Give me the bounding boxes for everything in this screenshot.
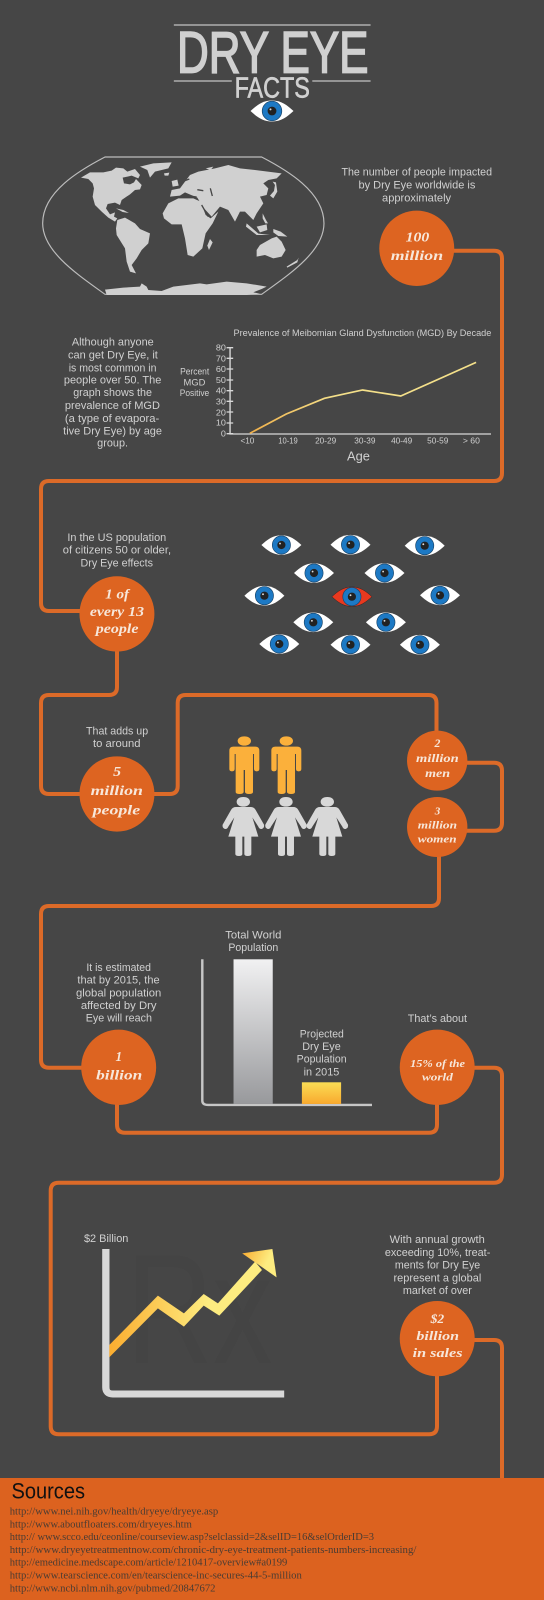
text: estimate: global population [76, 987, 161, 999]
y axis labels: 20 [216, 407, 226, 417]
source list: http:// www.scco.edu/ceonline/courseview.asp?selclassid=2&selID=16&selOrderID=3 [10, 1532, 374, 1543]
text: total world population: Population [228, 942, 278, 954]
circle: 2 million men: 2 [433, 737, 441, 750]
circle: 1 billion [81, 1030, 156, 1105]
new zealand [287, 258, 299, 268]
caribbean [116, 208, 129, 213]
circle: 3 million women: women [418, 834, 457, 845]
data line [250, 362, 476, 433]
circle: 5 million people: 5 [113, 764, 121, 780]
circle: 1 billion: 1 [116, 1049, 122, 1065]
text: annual growth: With annual growth [390, 1234, 485, 1246]
text: annual growth: exceeding 10%, treat- [385, 1247, 491, 1259]
x axis labels: 40-49 [391, 435, 412, 445]
text: worldwide intro: by Dry Eye worldwide is [358, 180, 476, 192]
source list: http://www.ncbi.nlm.nih.gov/pubmed/20847672 [10, 1583, 215, 1594]
text: age explanation: people over 50. The [64, 375, 161, 386]
panel: market growth [84, 1221, 491, 1397]
x axis labels: 50-59 [427, 435, 448, 445]
x axis labels: <10 [240, 435, 254, 445]
circle: 1 of every 13 people: every 13 [90, 604, 144, 619]
icon group: men and women [223, 736, 348, 856]
y axis title: MGD [184, 377, 206, 387]
y axis labels: 60 [216, 364, 226, 374]
text: age explanation: graph shows the [73, 387, 152, 399]
greenland [140, 162, 172, 178]
circle: 2 billion in sales [400, 1301, 475, 1376]
bar chart: population [202, 959, 372, 1105]
circle: 2 million men: million [416, 752, 459, 765]
circle: 3 million women: 3 [434, 806, 441, 818]
circle: 100 million: 100 [406, 230, 429, 244]
text: age explanation: group. [97, 438, 128, 450]
label: projected [297, 1028, 347, 1078]
text: estimate: that by 2015, the [77, 975, 160, 987]
circle: 1 of every 13 people: people [95, 621, 138, 636]
circle: 2 billion in sales: billion [416, 1328, 459, 1343]
heading: sources: Sources [11, 1479, 85, 1503]
text: age explanation: prevalence of MGD [65, 400, 160, 412]
text: estimate: It is estimated [86, 962, 151, 974]
text: total world population [225, 929, 281, 954]
y axis labels: 30 [216, 396, 226, 406]
circle: 2 million men: men [425, 767, 450, 780]
text: age explanation: is most common in [69, 363, 156, 374]
circle: 100 million [379, 211, 454, 286]
arrow head [242, 1249, 277, 1277]
icon: title eye [250, 100, 294, 122]
panel: mgd by age [63, 328, 491, 652]
x axis title: Age [347, 449, 370, 463]
y axis labels [216, 343, 226, 439]
y axis labels: 70 [216, 353, 226, 363]
icon group: thirteen eyes [244, 535, 460, 654]
text: adds up: That adds up [86, 726, 148, 738]
text: estimate [76, 962, 161, 1025]
growth chart [84, 1233, 284, 1394]
circle: 1 of every 13 people [79, 576, 154, 652]
south america [116, 218, 150, 273]
new guinea [273, 229, 287, 237]
text: annual growth [385, 1234, 491, 1297]
line chart: mgd prevalence [180, 328, 491, 463]
circle: 15% of the world [400, 1030, 475, 1105]
world map [43, 157, 324, 295]
y axis labels: 0 [221, 429, 226, 439]
watermark: rx: Rx [127, 1221, 272, 1397]
north america [81, 168, 142, 222]
text: worldwide intro [341, 167, 492, 205]
text: estimate: Eye will reach [86, 1013, 152, 1025]
circle: 15% of the world: 15% of the [410, 1058, 465, 1070]
australia [257, 237, 286, 258]
circle: 2 million men [407, 731, 467, 791]
circle: 3 million women: million [418, 820, 457, 831]
source list [10, 1506, 417, 1594]
circle: 1 of every 13 people: 1 of [105, 587, 131, 602]
connector path [41, 251, 502, 1480]
text: worldwide intro: approximately [382, 193, 451, 205]
source list: http://www.dryeyetreatmentnow.com/chronic-dry-eye-treatment-patients-numbers-increasing/ [10, 1545, 417, 1556]
africa [163, 198, 218, 257]
antarctica [105, 282, 267, 295]
chart axes [106, 1249, 284, 1394]
circle: 5 million people [79, 756, 154, 832]
text: age explanation: Although anyone [72, 337, 154, 348]
bar: world population [234, 959, 273, 1104]
label: projected: in 2015 [304, 1066, 339, 1078]
chart title: Prevalence of Meibomian Gland Dysfunction (MGD) By Decade [234, 328, 491, 338]
circle: 5 million people: million [91, 783, 143, 799]
label: 2 billion: $2 Billion [84, 1233, 128, 1245]
subtitle: facts: FACTS [235, 73, 310, 105]
panel: sources [0, 1478, 544, 1600]
circle: 2 billion in sales: in sales [413, 1345, 463, 1360]
source list: http://www.tearscience.com/en/tearscience-inc-secures-44-5-million [10, 1571, 302, 1582]
panel: five million [76, 726, 475, 1105]
y axis labels: 50 [216, 375, 226, 385]
icons: women [223, 797, 348, 856]
text: age explanation: tive Dry Eye) by age [63, 426, 162, 437]
text: total world population: Total World [225, 929, 281, 941]
circle: 5 million people: people [90, 803, 141, 818]
indonesia [246, 223, 270, 235]
text: adds up [86, 726, 148, 750]
circle: 3 million women [407, 797, 467, 857]
title block [174, 20, 371, 105]
text: adds up: to around [93, 738, 141, 750]
source list: http://www.nei.nih.gov/health/dryeye/dryeye.asp [10, 1506, 218, 1517]
circle: 15% of the world: world [422, 1071, 454, 1083]
y axis title [180, 366, 210, 398]
title: dry eye: DRY EYE [177, 20, 369, 85]
madagascar [207, 239, 213, 250]
philippines [263, 213, 268, 223]
x axis labels: 10-19 [278, 435, 298, 445]
japan [270, 182, 277, 198]
british isles and iceland [164, 167, 213, 187]
panel: worldwide [341, 167, 492, 286]
text: annual growth: ments for Dry Eye [395, 1260, 480, 1272]
source list: http://emedicine.medscape.com/article/1210417-overview#a0199 [10, 1558, 287, 1569]
x axis labels: > 60 [463, 435, 480, 445]
text: age explanation [63, 337, 162, 450]
icons: men [229, 736, 301, 794]
circle: 2 billion in sales: $2 [430, 1311, 445, 1326]
text: us population: of citizens 50 or older, [63, 545, 171, 557]
y axis labels: 40 [216, 386, 226, 396]
source list: http://www.aboutfloaters.com/dryeyes.htm [10, 1519, 192, 1530]
text: age explanation: (a type of evapora- [65, 413, 160, 425]
text: age explanation: can get Dry Eye, it [68, 350, 159, 361]
circle: 1 billion: billion [96, 1068, 142, 1083]
eurasia [170, 165, 282, 222]
text: us population [63, 532, 171, 569]
inland seas [183, 179, 212, 217]
text: annual growth: market of over [403, 1285, 472, 1297]
text: us population: Dry Eye effects [81, 557, 153, 569]
text: annual growth: represent a global [393, 1273, 481, 1285]
text: us population: In the US population [67, 532, 166, 544]
arrow shaft [109, 1262, 262, 1357]
y axis title: Positive [180, 388, 209, 398]
label: projected: Projected [300, 1028, 344, 1040]
x axis labels: 20-29 [315, 435, 336, 445]
label: projected: Population [297, 1054, 347, 1066]
y axis labels: 10 [216, 418, 226, 428]
label: projected: Dry Eye [302, 1041, 341, 1053]
y axis labels: 80 [216, 343, 226, 353]
circle: 100 million: million [391, 248, 443, 263]
text: that's about: That’s about [408, 1013, 468, 1025]
bar: dry eye population [302, 1082, 341, 1104]
x axis labels [240, 435, 480, 445]
x axis labels: 30-39 [354, 435, 376, 445]
text: worldwide intro: The number of people impacted [341, 167, 492, 179]
text: estimate: affected by Dry [81, 1000, 157, 1012]
y axis title: Percent [180, 366, 210, 376]
